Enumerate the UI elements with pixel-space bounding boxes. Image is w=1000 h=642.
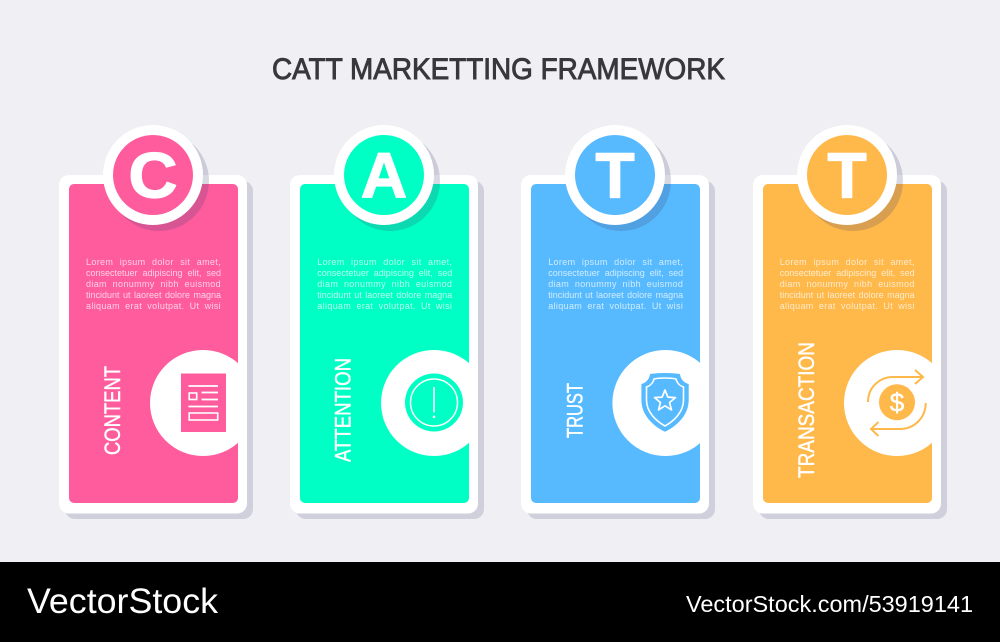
- body text: aliquam erat volutpat. Ut wisi: [780, 301, 915, 311]
- vertical label: transaction: TRANSACTION: [794, 342, 819, 478]
- letter badge: A: [334, 125, 440, 231]
- letter badge: A: A: [361, 139, 407, 211]
- body text: consectetuer adipiscing elit, sed: [548, 268, 683, 278]
- vertical label: trust: TRUST: [563, 383, 588, 438]
- icon: dollar exchange: $: [889, 388, 904, 418]
- body text: [780, 257, 915, 311]
- body text: [317, 257, 452, 311]
- card frame: [753, 175, 947, 519]
- body text: diam nonummy nibh euismod: [548, 279, 683, 289]
- card frame: [59, 175, 253, 519]
- body text: diam nonummy nibh euismod: [86, 279, 221, 289]
- vertical label: content: CONTENT: [100, 366, 125, 455]
- body text: tincidunt ut laoreet dolore magna: [317, 290, 452, 300]
- panel: transaction: [753, 125, 947, 519]
- body text: consectetuer adipiscing elit, sed: [317, 268, 452, 278]
- body text: [548, 257, 684, 311]
- letter badge: C: C: [129, 139, 177, 211]
- panel: content: [59, 125, 253, 519]
- card frame: [290, 175, 484, 519]
- body text: consectetuer adipiscing elit, sed: [780, 268, 915, 278]
- body text: diam nonummy nibh euismod: [317, 279, 452, 289]
- letter badge: T: T: [596, 139, 635, 211]
- body text: Lorem ipsum dolor sit amet,: [86, 257, 221, 267]
- body text: Lorem ipsum dolor sit amet,: [317, 257, 452, 267]
- body text: aliquam erat volutpat. Ut wisi: [317, 301, 452, 311]
- letter badge: T: T: [827, 139, 866, 211]
- icon: dollar exchange: [844, 350, 932, 456]
- footer logo wordmark: VectorStock: [27, 582, 219, 621]
- title: CATT MARKETTING FRAMEWORK: [272, 53, 725, 86]
- letter badge: T: [797, 125, 903, 231]
- panel: attention: [290, 125, 484, 519]
- body text: tincidunt ut laoreet dolore magna: [780, 290, 915, 300]
- letter badge: C: [103, 125, 209, 231]
- body text: [86, 257, 221, 311]
- card frame: [521, 175, 715, 519]
- vertical label: attention: ATTENTION: [331, 358, 356, 462]
- body text: consectetuer adipiscing elit, sed: [86, 268, 221, 278]
- icon: exclamation: [381, 350, 469, 456]
- panel: trust: [521, 125, 715, 519]
- body text: aliquam erat volutpat. Ut wisi: [86, 301, 221, 311]
- body text: Lorem ipsum dolor sit amet,: [548, 257, 683, 267]
- body text: Lorem ipsum dolor sit amet,: [780, 257, 915, 267]
- body text: aliquam erat volutpat. Ut wisi: [548, 301, 683, 311]
- icon: document: [150, 350, 238, 456]
- footer image id: VectorStock.com/53919141: [686, 591, 973, 617]
- body text: tincidunt ut laoreet dolore magna: [548, 290, 683, 300]
- icon: shield with star: [612, 350, 700, 456]
- footer bar: [0, 562, 1000, 642]
- body text: tincidunt ut laoreet dolore magna: [86, 290, 221, 300]
- body text: diam nonummy nibh euismod: [780, 279, 915, 289]
- letter badge: T: [565, 125, 671, 231]
